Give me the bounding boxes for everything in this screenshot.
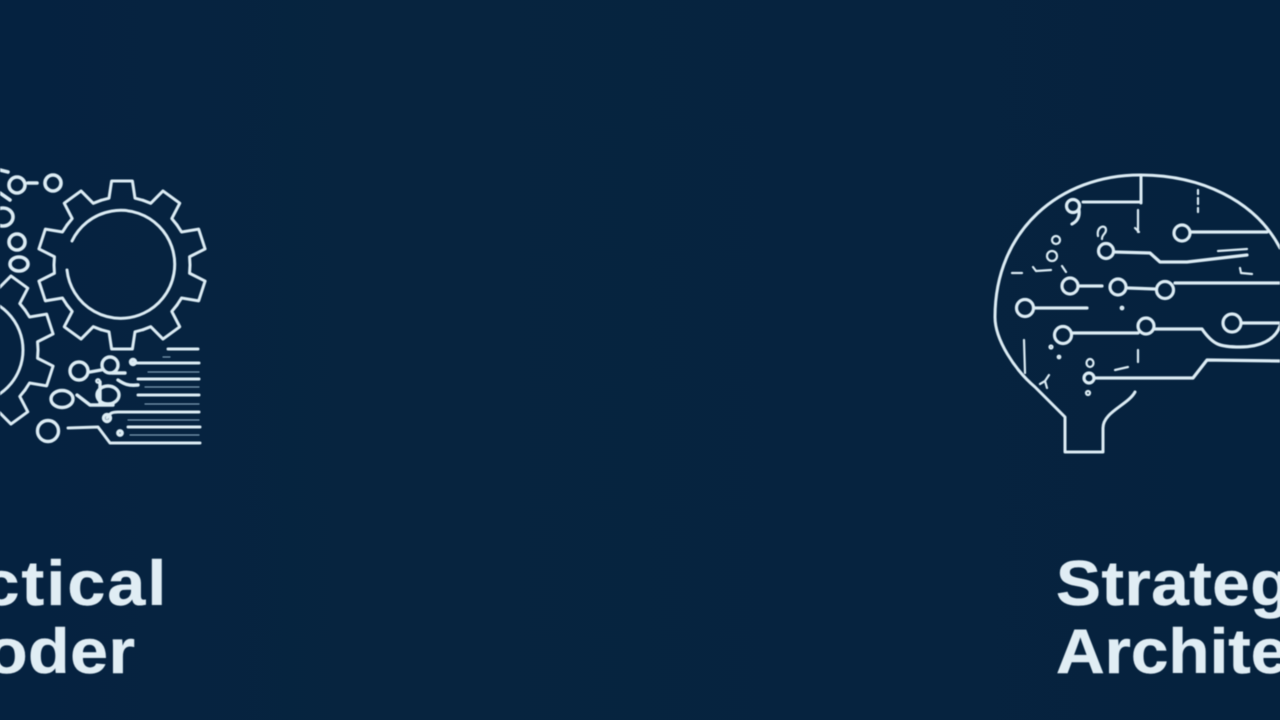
icon: brain with circuit bbox=[995, 175, 1280, 452]
circuit traces bbox=[68, 349, 200, 443]
icon: gears and circuit bbox=[0, 170, 208, 443]
brain outline bbox=[995, 175, 1280, 452]
heading: Tactical Coder bbox=[0, 549, 169, 687]
heading: Strategic Architect bbox=[1056, 549, 1280, 687]
circuit nodes above gears bbox=[0, 170, 61, 271]
nodes and traces bbox=[1016, 200, 1280, 383]
top traces bbox=[1083, 175, 1141, 203]
large gear bbox=[36, 181, 208, 349]
circuit nodes below gears bbox=[38, 357, 138, 442]
small circuit specks bbox=[1012, 190, 1252, 395]
small gear bbox=[0, 270, 56, 430]
